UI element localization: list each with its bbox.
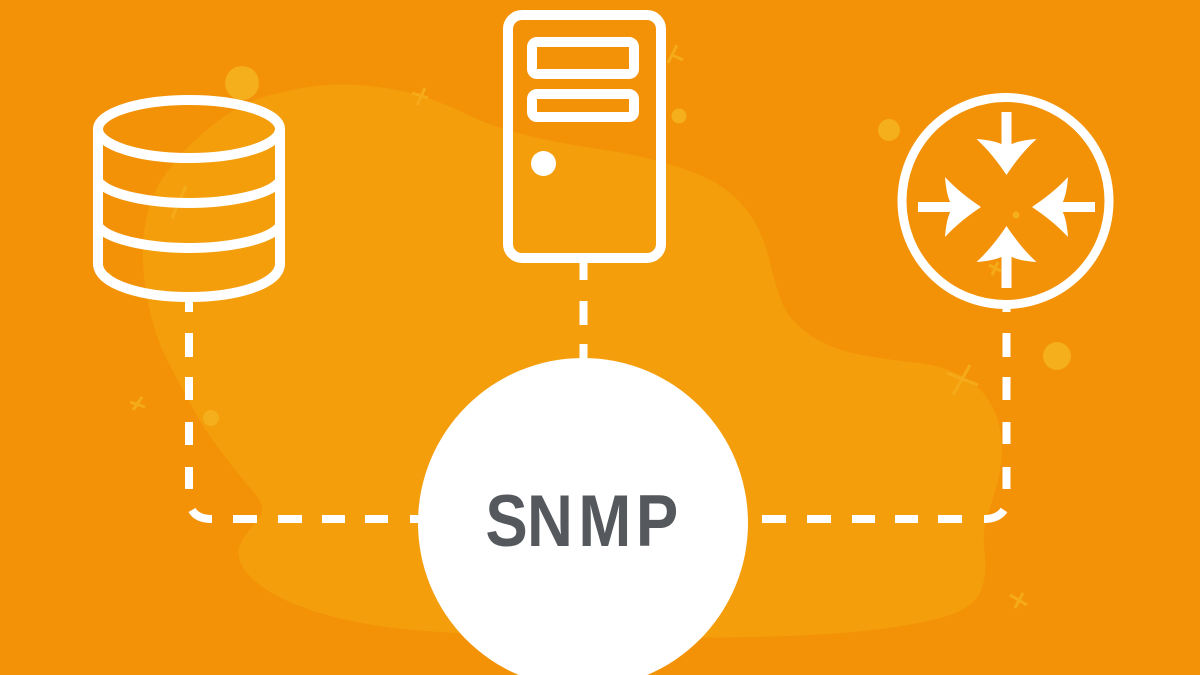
arrow: bottom: [976, 226, 1036, 288]
dashed connectors: [189, 258, 1006, 519]
label: SNMP: [485, 481, 678, 562]
arrow: top: [976, 112, 1036, 175]
arrow: right: [1032, 177, 1095, 237]
decorative dots: [102, 66, 1071, 426]
icon: router: [902, 98, 1109, 304]
arrow: left: [918, 177, 981, 237]
icon: server tower: [508, 15, 661, 258]
decorative crosses: [130, 45, 1027, 608]
icon: database: [98, 100, 280, 297]
background blob: [143, 85, 1002, 638]
SNMP circle: [418, 358, 748, 675]
